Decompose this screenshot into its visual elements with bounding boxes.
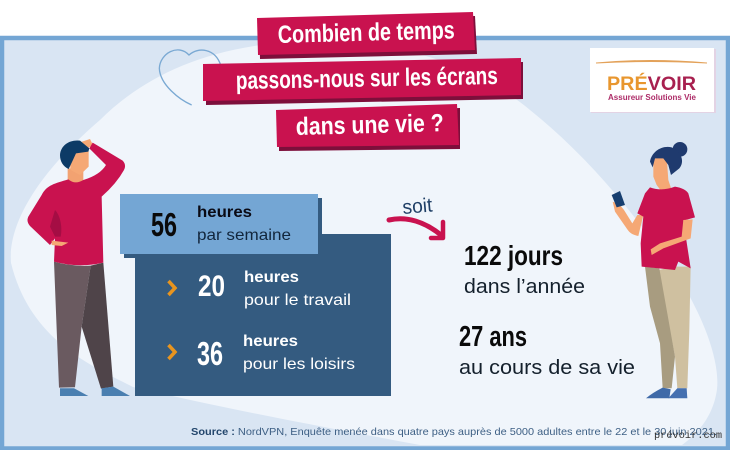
- illustration: woman with phone: [612, 142, 695, 398]
- stat: 27 years over a lifetime: au cours de sa vie: [459, 357, 635, 379]
- title banner line 2: passons-nous sur les écrans: [236, 62, 498, 95]
- illustration: man scratching head: [27, 139, 130, 396]
- row: 36 hours for leisure: [168, 333, 355, 373]
- arrow: soit: [389, 194, 443, 238]
- panel: 56 hours per week: par semaine: [197, 227, 291, 244]
- row: 20 hours for work: pour le travail: [244, 292, 351, 309]
- logo: Prévoir: PRÉVOIR: [607, 72, 696, 95]
- title: [203, 12, 523, 151]
- title banner line 2: [203, 58, 523, 105]
- panel: weekly hours breakdown: [120, 194, 391, 396]
- logo: Prévoir: Assureur Solutions Vie: [608, 93, 697, 102]
- row: 36 hours for leisure: heures: [243, 333, 298, 350]
- stat: 27 years over a lifetime: [459, 321, 635, 379]
- stat: 122 days per year: dans l’année: [464, 276, 585, 298]
- row: 20 hours for work: heures: [244, 269, 299, 286]
- arrow: soit: soit: [402, 194, 434, 219]
- watermark: prévoir.com: [654, 430, 722, 442]
- stat: 122 days per year: [464, 240, 585, 298]
- stat: 27 years over a lifetime: 27 ans: [459, 321, 527, 353]
- source note: Source : NordVPN, Enquête menée dans quatre pays auprès de 5000 adultes entre le 22 et le 30 juin 2021.: [191, 426, 717, 438]
- title banner line 1: Combien de temps: [277, 16, 455, 49]
- row: 20 hours for work: 20: [198, 270, 225, 303]
- title banner line 3: dans une vie ?: [295, 109, 444, 141]
- panel: 56 hours per week: heures: [197, 204, 252, 221]
- row: 36 hours for leisure: 36: [197, 335, 223, 372]
- logo: Prévoir: [590, 48, 716, 113]
- stat: 122 days per year: 122 jours: [464, 240, 563, 271]
- icon: heart outline: [159, 50, 221, 105]
- title banner line 1: [257, 12, 477, 59]
- row: 36 hours for leisure: pour les loisirs: [243, 356, 355, 373]
- panel: 56 hours per week: 56: [151, 206, 177, 243]
- title banner line 3: [276, 104, 460, 151]
- panel: 56 hours per week: [120, 194, 322, 258]
- row: 20 hours for work: [168, 269, 351, 309]
